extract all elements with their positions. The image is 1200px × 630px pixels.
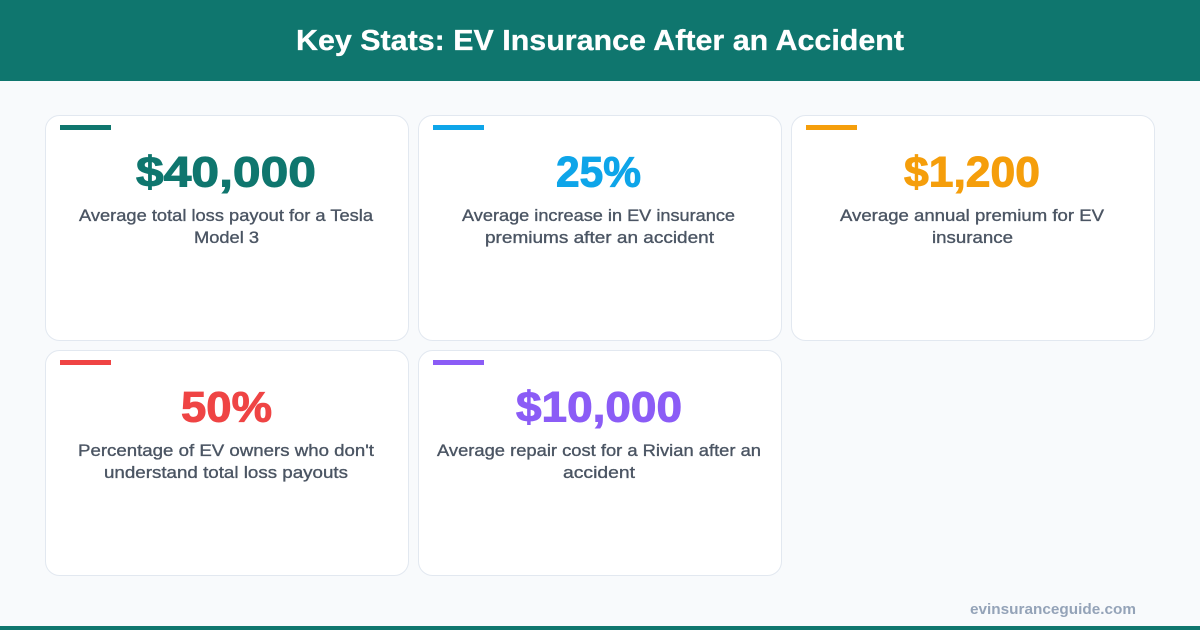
- description: premium increase: premiums after an accident: [485, 228, 714, 247]
- stat: $10,000: $10,000: [516, 384, 682, 432]
- description: premium increase: [462, 206, 735, 247]
- title: Key Stats: EV Insurance After an Accident: [296, 25, 904, 57]
- panel: owner understanding: [46, 350, 408, 576]
- bottom bar: [0, 626, 1200, 630]
- description: Tesla payout: Average total loss payout for a Tesla: [79, 206, 374, 225]
- panel: annual premium: [792, 116, 1154, 340]
- description: Rivian repair: [437, 441, 761, 482]
- stat: $1,200: $1,200: [904, 148, 1040, 196]
- description: annual premium: [840, 206, 1105, 247]
- description: Tesla payout: [79, 206, 374, 247]
- description: Tesla payout: Model 3: [194, 228, 259, 247]
- description: annual premium: insurance: [932, 228, 1013, 247]
- stat: $40,000: $40,000: [136, 148, 316, 196]
- stat: 50%: 50%: [181, 384, 272, 432]
- panel: Tesla total loss payout: [46, 116, 408, 340]
- footer source: evinsuranceguide.com: [970, 601, 1136, 618]
- panel: Rivian repair cost: [418, 350, 782, 576]
- description: Rivian repair: accident: [563, 463, 635, 482]
- description: owner understanding: Percentage of EV owners who don't: [78, 441, 374, 460]
- panel: premium increase: [418, 116, 782, 340]
- description: premium increase: Average increase in EV insurance: [462, 206, 735, 225]
- header banner: [0, 0, 1200, 81]
- description: annual premium: Average annual premium for EV: [840, 206, 1105, 225]
- stat: 25%: 25%: [556, 148, 641, 196]
- description: owner understanding: understand total loss payouts: [104, 463, 348, 482]
- description: owner understanding: [78, 441, 374, 482]
- description: Rivian repair: Average repair cost for a Rivian after an: [437, 441, 761, 460]
